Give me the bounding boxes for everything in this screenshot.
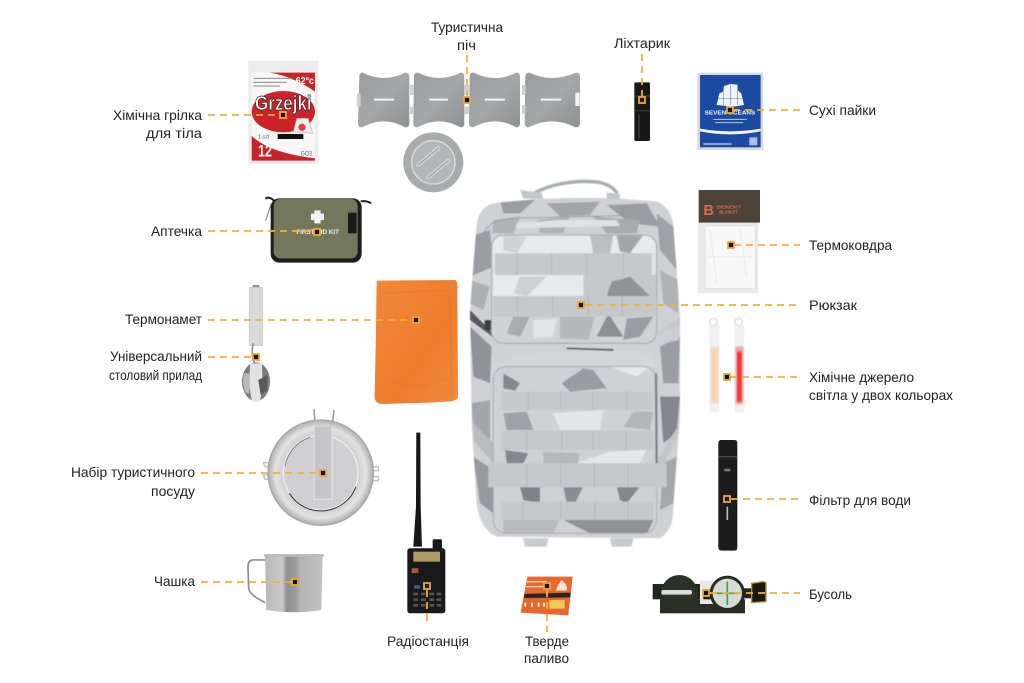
icon: first aid kit: FIRST AID KIT bbox=[296, 229, 339, 236]
webbing straps bbox=[488, 253, 667, 520]
callout: Хімічна грілка для тіла bbox=[113, 107, 286, 141]
lower pocket bbox=[493, 348, 657, 535]
callout: Чашка: Чашка bbox=[154, 573, 195, 589]
callout: Універсальний столовий прилад bbox=[109, 348, 259, 383]
callout: Набір туристичного посуду: Набір туристичного bbox=[71, 464, 195, 480]
icon: flashlight bbox=[634, 82, 650, 141]
callout: Тверде паливо: Тверде bbox=[525, 633, 569, 649]
icon: glow sticks bbox=[709, 318, 744, 412]
icon: chemical body warmer: Grzejki bbox=[255, 92, 312, 115]
callout: Туристична піч: піч bbox=[457, 37, 476, 53]
callout: Універсальний столовий прилад: столовий прилад bbox=[109, 367, 202, 383]
callout: Бусоль: Бусоль bbox=[809, 586, 852, 602]
callout: Хімічне джерело світла у двох кольорах bbox=[724, 369, 953, 403]
icon: solid fuel box bbox=[521, 577, 573, 615]
icon: backpack bbox=[470, 181, 680, 547]
upper pocket bbox=[492, 235, 657, 343]
icon: dry rations bbox=[697, 73, 763, 150]
callout: Хімічна грілка для тіла: для тіла bbox=[146, 125, 202, 141]
icon: dry rations: SEVEN OCEANS bbox=[705, 111, 756, 117]
icon: chemical body warmer: 1 szt bbox=[258, 134, 270, 140]
icon: thermal blanket: B bbox=[703, 203, 714, 219]
icon: camping stove bbox=[357, 73, 580, 192]
callout: Термоковдра bbox=[728, 237, 892, 253]
callout: Ліхтарик: Ліхтарик bbox=[614, 35, 671, 51]
callout: Тверде паливо: паливо bbox=[524, 650, 569, 666]
icon: metal cup bbox=[248, 554, 324, 612]
callout: Хімічне джерело світла у двох кольорах: Хімічне джерело bbox=[809, 369, 914, 385]
callout: Термонамет: Термонамет bbox=[125, 311, 203, 327]
callout: Туристична піч bbox=[431, 19, 503, 103]
callout: Аптечка bbox=[151, 223, 320, 239]
icon: cookware set bbox=[263, 409, 378, 525]
icon: chemical body warmer: GO3 bbox=[301, 150, 312, 157]
icon: water filter bbox=[718, 440, 737, 551]
icon: universal cutlery bbox=[242, 285, 270, 402]
icon: thermal blanket: EMERGENCY bbox=[717, 205, 741, 210]
callout: Тверде паливо bbox=[524, 583, 569, 666]
callout: Термонамет bbox=[125, 311, 419, 327]
callout: Фільтр для води: Фільтр для води bbox=[809, 492, 911, 508]
callout: Набір туристичного посуду: посуду bbox=[151, 483, 195, 499]
callout: Набір туристичного посуду bbox=[71, 464, 326, 499]
icon: compass bbox=[653, 575, 766, 613]
callout: Універсальний столовий прилад: Універсальний bbox=[110, 348, 202, 364]
callout: Рюкзак: Рюкзак bbox=[809, 297, 858, 313]
icon: thermal tent bbox=[375, 280, 458, 404]
callout: Термоковдра: Термоковдра bbox=[809, 237, 892, 253]
callout: Радіостанція bbox=[387, 583, 469, 649]
icon: thermal blanket bbox=[698, 190, 760, 293]
callout: Бусоль bbox=[703, 586, 852, 602]
icon: first aid kit bbox=[265, 198, 371, 263]
round stove plate bbox=[403, 132, 463, 192]
callout: Сухі пайки bbox=[727, 102, 876, 118]
icon: radio bbox=[407, 433, 445, 613]
callout: Хімічна грілка для тіла: Хімічна грілка bbox=[113, 107, 202, 123]
callout: Туристична піч: Туристична bbox=[431, 19, 503, 35]
icon: chemical body warmer: 62°c bbox=[296, 76, 314, 87]
callout: Ліхтарик bbox=[614, 35, 671, 103]
icon: chemical body warmer: 12 bbox=[258, 142, 272, 161]
icon: thermal blanket: BLANKET bbox=[719, 209, 738, 214]
callout: Радіостанція: Радіостанція bbox=[387, 633, 469, 649]
callout: Рюкзак bbox=[578, 297, 858, 313]
callout: Чашка bbox=[154, 573, 298, 589]
callout: Хімічне джерело світла у двох кольорах: світла у двох кольорах bbox=[809, 387, 953, 403]
callout: Сухі пайки: Сухі пайки bbox=[809, 102, 876, 118]
callout: Аптечка: Аптечка bbox=[151, 223, 202, 239]
icon: chemical body warmer bbox=[248, 61, 318, 164]
callout: Фільтр для води bbox=[724, 492, 911, 508]
